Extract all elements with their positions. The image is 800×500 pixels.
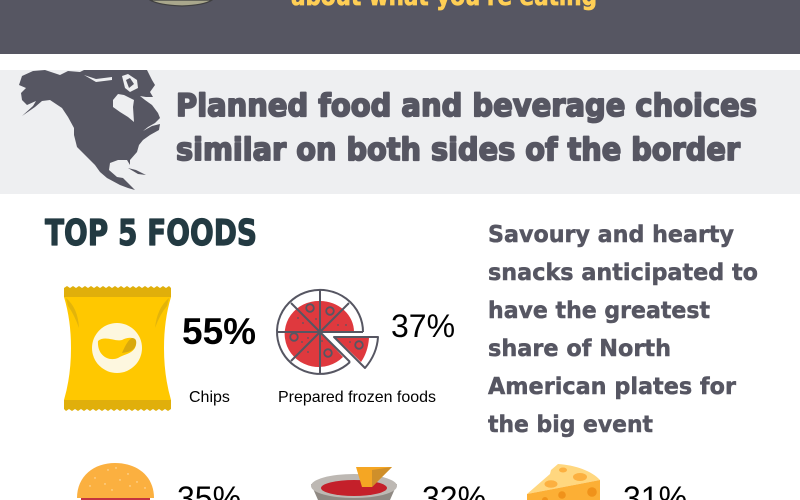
text block: savoury snacks: share of North: [488, 334, 671, 362]
stat: chips: 55%: [182, 311, 256, 352]
text block: savoury snacks: the big event: [488, 410, 653, 438]
text block: savoury snacks: snacks anticipated to: [488, 258, 758, 286]
text block: savoury snacks: have the greatest: [488, 296, 710, 324]
icon: burger: [77, 463, 154, 500]
heading: Planned food and beverage choices: [176, 88, 757, 124]
icon: North America map: [19, 70, 160, 190]
text block: savoury snacks: [488, 220, 758, 438]
top banner: [0, 0, 800, 54]
stat: prepared frozen foods: Prepared frozen foods: [278, 389, 436, 406]
icon: salsa dip: [311, 467, 397, 500]
stat: chips: Chips: [189, 389, 230, 406]
heading: [176, 88, 757, 168]
text block: savoury snacks: American plates for: [488, 372, 736, 400]
stat: prepared frozen foods: 37%: [391, 308, 455, 344]
stat: prepared frozen foods: [278, 308, 455, 406]
stat: chips: [182, 311, 256, 406]
icon: pizza: [277, 290, 378, 374]
text block: savoury snacks: Savoury and hearty: [488, 220, 734, 248]
panel: heading band: [0, 70, 800, 194]
title: top 5 foods: TOP 5 FOODS: [45, 213, 257, 254]
heading: similar on both sides of the border: [176, 132, 741, 168]
icon: bowl base: [150, 0, 212, 6]
icon: chips bag: [64, 286, 171, 411]
icon: cheese: [527, 464, 600, 500]
